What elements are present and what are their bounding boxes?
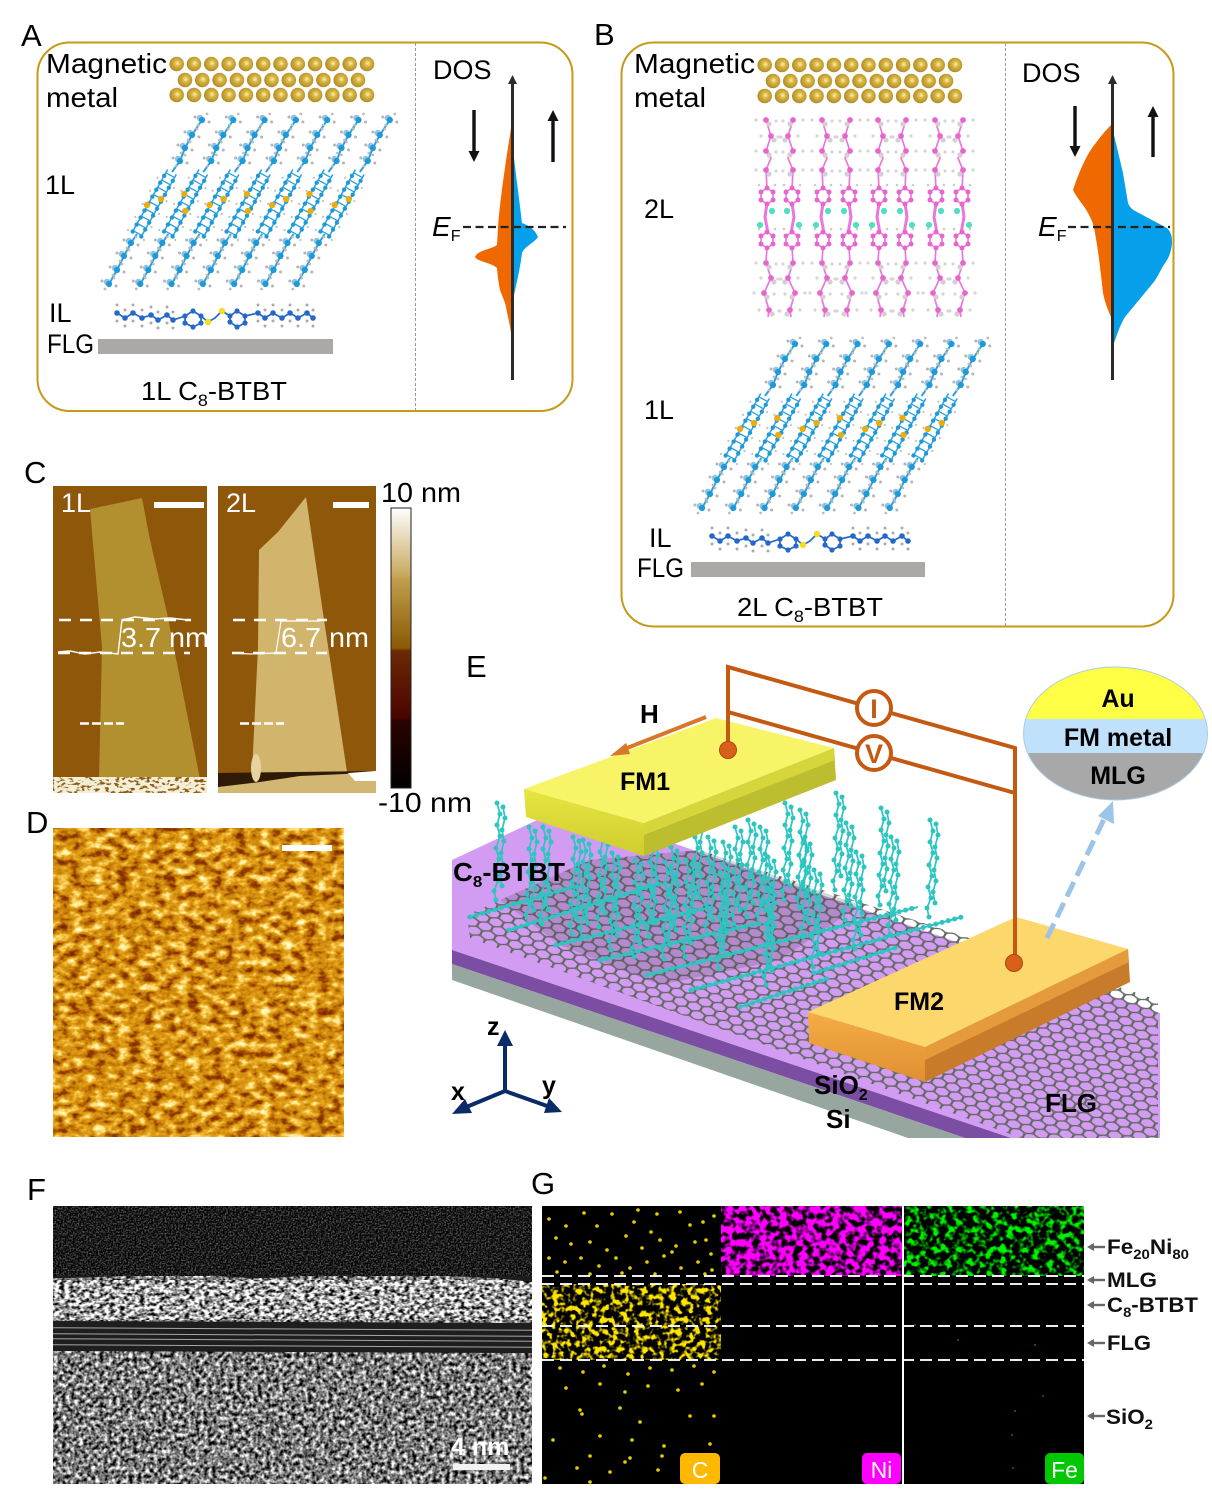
- axis labels: y: [542, 1072, 556, 1100]
- scale bar 2L: [333, 502, 369, 508]
- panel: EDS maps: [542, 1206, 1198, 1484]
- panel: 1L C8-BTBT junction: [38, 42, 572, 411]
- layer labels: 2: [1145, 1416, 1153, 1432]
- label Si: Si: [826, 1104, 851, 1134]
- label C8-BTBT: C: [453, 857, 472, 887]
- map C: [542, 1206, 721, 1484]
- second molecular layer: [752, 117, 977, 317]
- lying molecules: [470, 883, 962, 1007]
- scale bar F: [453, 1464, 510, 1470]
- map Fe: [904, 1206, 1084, 1484]
- axis labels: x: [451, 1078, 465, 1106]
- caption: -BTBT: [804, 592, 883, 622]
- FLG bar: [98, 339, 333, 354]
- panel: AFM 2L image: [218, 486, 376, 793]
- first molecular layer: [694, 337, 991, 514]
- label SiO2: SiO: [814, 1070, 859, 1100]
- current meter: [857, 691, 891, 725]
- spin up arrow: [1148, 106, 1158, 157]
- DOS curve A: [463, 75, 566, 380]
- FLG bar: [691, 562, 925, 577]
- map Ni: Ni: [871, 1457, 892, 1483]
- label IL: IL: [49, 298, 72, 328]
- label 1L: 1L: [644, 395, 674, 425]
- map C: C: [692, 1457, 708, 1483]
- DOS heading: DOS: [1022, 58, 1081, 88]
- Fermi level label: E: [432, 211, 451, 242]
- panel letter E: E: [466, 649, 487, 684]
- electrode FM1: FM1: [620, 768, 670, 796]
- standing molecules: [492, 790, 940, 988]
- layer labels: -BTBT: [1131, 1294, 1198, 1317]
- height 2L: 6.7 nm: [281, 622, 369, 653]
- zoom arrow: [1047, 801, 1114, 938]
- spin down arrow: [468, 110, 480, 162]
- map Fe: Fe: [1051, 1457, 1078, 1483]
- Fermi level label: E: [1038, 211, 1057, 242]
- axis labels: z: [487, 1013, 500, 1041]
- layer labels: MLG: [1107, 1269, 1157, 1292]
- caption: -BTBT: [208, 376, 287, 406]
- panel letter F: F: [27, 1172, 46, 1207]
- DOS heading: DOS: [433, 55, 492, 85]
- label 1L: 1L: [61, 488, 91, 518]
- panel letter D: D: [26, 805, 48, 840]
- axis labels: [451, 1013, 556, 1106]
- voltage meter: V: [865, 739, 883, 769]
- label IL: IL: [649, 523, 672, 553]
- layer labels: Fe: [1107, 1236, 1132, 1259]
- Fermi level label: F: [451, 228, 461, 245]
- colour scale: [378, 477, 472, 818]
- caption: 1L C: [141, 376, 195, 406]
- label C8-BTBT: 8: [473, 874, 482, 891]
- label 2L: 2L: [226, 488, 256, 518]
- panel: TEM cross section: [53, 1206, 532, 1484]
- layer boundaries: [542, 1276, 1084, 1360]
- panel: device schematic: [451, 660, 1212, 1138]
- divider B: [1004, 43, 1006, 626]
- substrate: [452, 806, 1160, 1138]
- stack inset: FM metal: [1064, 724, 1172, 752]
- scale bar D: [282, 845, 332, 851]
- electrode FM2: [808, 917, 1130, 1082]
- label SiO2: 2: [859, 1087, 868, 1104]
- layer labels: Ni: [1150, 1236, 1172, 1259]
- Fermi level label: F: [1057, 228, 1067, 245]
- divider A: [414, 43, 416, 410]
- panel: AFM 1L image: [53, 486, 207, 794]
- label: magnetic metal: Magnetic: [634, 48, 755, 79]
- interfacial molecule: [114, 304, 316, 330]
- electrode FM1: [524, 718, 836, 856]
- axis arrowheads: [452, 1030, 562, 1114]
- scale bar 1L: [154, 502, 204, 508]
- stack inset: [1020, 660, 1212, 803]
- graphene sheet: [467, 850, 1158, 1138]
- gold atoms: [757, 58, 962, 103]
- voltage meter: [857, 736, 891, 770]
- label 1L: 1L: [45, 170, 75, 200]
- layer labels: C: [1107, 1294, 1122, 1317]
- layer labels: 8: [1123, 1304, 1132, 1320]
- panel letter A: A: [21, 18, 42, 53]
- max label: 10 nm: [381, 477, 461, 508]
- interfacial molecule: [709, 526, 911, 553]
- scale label F: 4 nm: [451, 1433, 509, 1461]
- caption: 2L C: [737, 592, 791, 622]
- magnetic field arrow: [610, 717, 706, 756]
- AFM annotations: [58, 488, 369, 724]
- layer labels: SiO: [1106, 1406, 1142, 1429]
- axes: [464, 1042, 550, 1108]
- layer labels: 80: [1172, 1246, 1189, 1262]
- spin down arrow: [1070, 106, 1080, 157]
- panel frame B: [622, 42, 1174, 626]
- panel letter C: C: [24, 455, 46, 490]
- panel: molecular resolution AFM: [53, 828, 344, 1137]
- molecular monolayer: [100, 113, 398, 290]
- circuit wires: [728, 667, 1015, 962]
- layer labels: [1087, 1236, 1198, 1432]
- label FLG: FLG: [1045, 1088, 1097, 1118]
- gold atoms: [169, 57, 374, 102]
- label 2L: 2L: [644, 194, 674, 224]
- label FLG: FLG: [637, 553, 684, 583]
- map Ni: [721, 1206, 902, 1484]
- label: magnetic metal: [46, 48, 167, 113]
- current meter: I: [870, 694, 878, 724]
- caption: 8: [794, 607, 804, 626]
- label FLG: FLG: [47, 329, 94, 359]
- height 1L: 3.7 nm: [121, 622, 209, 653]
- stack inset: Au: [1101, 685, 1135, 713]
- label: magnetic metal: metal: [634, 82, 706, 113]
- panel letter G: G: [531, 1166, 555, 1201]
- spin up arrow: [548, 110, 558, 162]
- contact dot FM2: [1006, 954, 1022, 972]
- label C8-BTBT: -BTBT: [482, 857, 565, 887]
- panel letter B: B: [594, 17, 615, 52]
- contact dot FM1: [720, 742, 736, 758]
- min label: -10 nm: [378, 787, 472, 818]
- caption: 8: [198, 391, 208, 410]
- DOS curve B: [1068, 75, 1172, 380]
- electrode FM2: FM2: [894, 988, 944, 1016]
- layer labels: 20: [1133, 1246, 1150, 1262]
- layer labels: FLG: [1107, 1332, 1151, 1355]
- panel frame A: [38, 42, 572, 411]
- stack inset: MLG: [1090, 762, 1146, 790]
- panel: 2L C8-BTBT junction: [622, 42, 1174, 626]
- label H: H: [640, 699, 659, 729]
- height markers: [58, 617, 327, 724]
- label: magnetic metal: [634, 48, 755, 113]
- label: magnetic metal: Magnetic: [46, 48, 167, 79]
- label: magnetic metal: metal: [46, 82, 118, 113]
